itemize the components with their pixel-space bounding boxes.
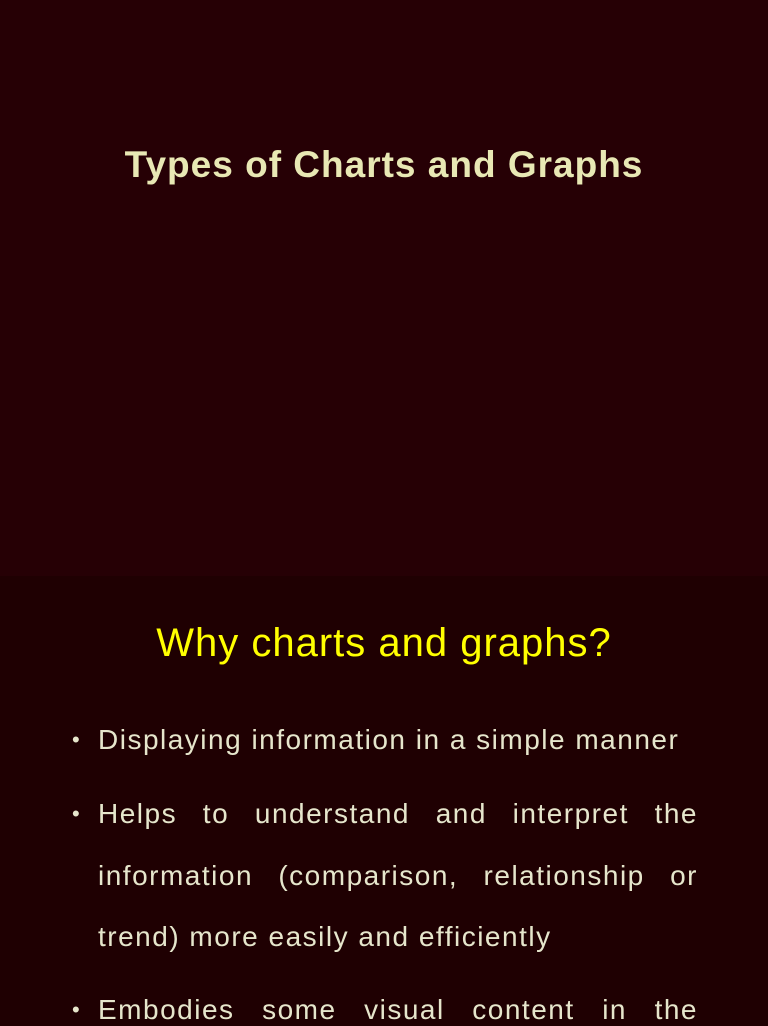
text: • bbox=[72, 727, 81, 752]
title: Types of Charts and Graphs bbox=[125, 144, 643, 185]
bullet 2: trend) more easily and efficiently bbox=[98, 921, 552, 952]
panel: title slide bbox=[0, 0, 768, 576]
heading: why charts: Why charts and graphs? bbox=[156, 621, 612, 665]
bullet 2: • bbox=[72, 801, 81, 826]
text: • bbox=[72, 997, 81, 1022]
bullet 1: Displaying information in a simple manner bbox=[98, 724, 679, 755]
bullet 2: information (comparison, relationship or bbox=[98, 860, 698, 891]
bullet 3: Embodies some visual content in the bbox=[98, 994, 698, 1025]
bullet 2: Helps to understand and interpret the bbox=[98, 798, 698, 829]
